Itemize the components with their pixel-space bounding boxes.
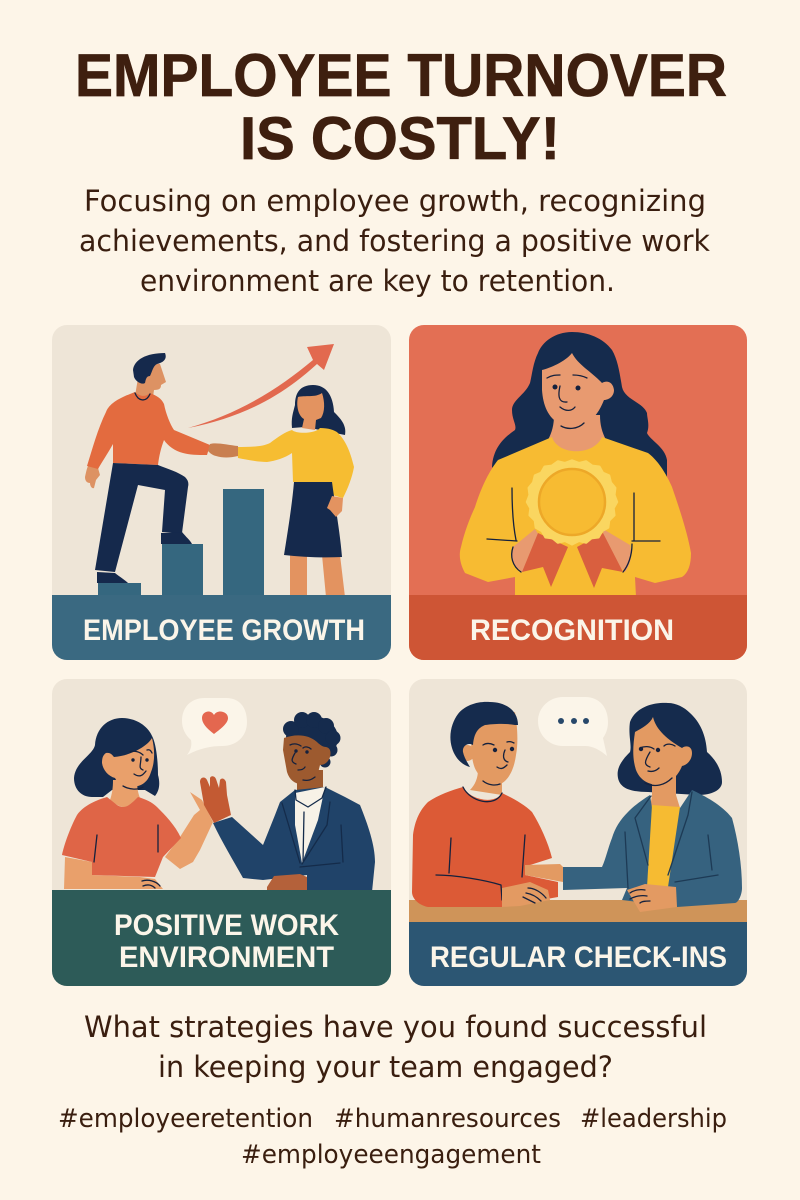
- sleeve creases: [487, 488, 660, 541]
- label band: [52, 595, 391, 660]
- woman with medal: [460, 332, 691, 597]
- growth arrow: [188, 344, 334, 428]
- speech bubble with dots: [538, 697, 608, 756]
- clasped hands: [502, 882, 677, 912]
- label: REGULAR CHECK-INS: [430, 941, 727, 974]
- intro text: [79, 184, 710, 298]
- hashtags: #leadership: [580, 1104, 727, 1134]
- closing question: What strategies have you found successful: [84, 1010, 707, 1044]
- panel: positive work environment: [52, 679, 391, 986]
- label: POSITIVE WORK: [114, 909, 339, 942]
- panel: employee growth: [52, 325, 391, 660]
- hashtags: #humanresources: [334, 1104, 561, 1134]
- hands: [512, 529, 631, 572]
- intro text: Focusing on employee growth, recognizing: [84, 184, 706, 218]
- closing question: in keeping your team engaged?: [158, 1050, 613, 1084]
- woman shaking hand: [237, 385, 354, 597]
- label: ENVIRONMENT: [119, 941, 334, 974]
- label: [116, 914, 339, 968]
- title: EMPLOYEE TURNOVER: [75, 42, 727, 109]
- panel: regular check-ins: [409, 679, 747, 986]
- title: IS COSTLY!: [240, 105, 560, 172]
- hashtags: #employeeretention: [58, 1104, 313, 1134]
- woman in red shirt: [62, 718, 213, 889]
- steps and bar: [98, 489, 264, 597]
- face details: [547, 375, 587, 428]
- label band: [409, 595, 747, 660]
- ribbons: [522, 533, 623, 588]
- panel: recognition: [409, 325, 747, 660]
- handshake: [208, 443, 238, 458]
- label: EMPLOYEE GROWTH: [83, 614, 365, 647]
- closing question: [84, 1010, 707, 1084]
- man in navy jacket: [200, 712, 375, 892]
- label: RECOGNITION: [470, 614, 674, 647]
- table: [409, 900, 747, 922]
- intro text: environment are key to retention.: [140, 264, 615, 298]
- medal: [527, 461, 617, 544]
- hashtags: #employeeengagement: [241, 1140, 541, 1170]
- hashtags: [58, 1104, 727, 1170]
- label band: [52, 890, 391, 986]
- intro text: achievements, and fostering a positive work: [79, 224, 710, 258]
- man in orange shirt: [412, 702, 558, 907]
- label band: [409, 922, 747, 986]
- speech bubble with heart: [182, 698, 247, 755]
- woman in teal jacket: [525, 703, 742, 907]
- man climbing: [85, 353, 210, 583]
- title: [75, 42, 727, 172]
